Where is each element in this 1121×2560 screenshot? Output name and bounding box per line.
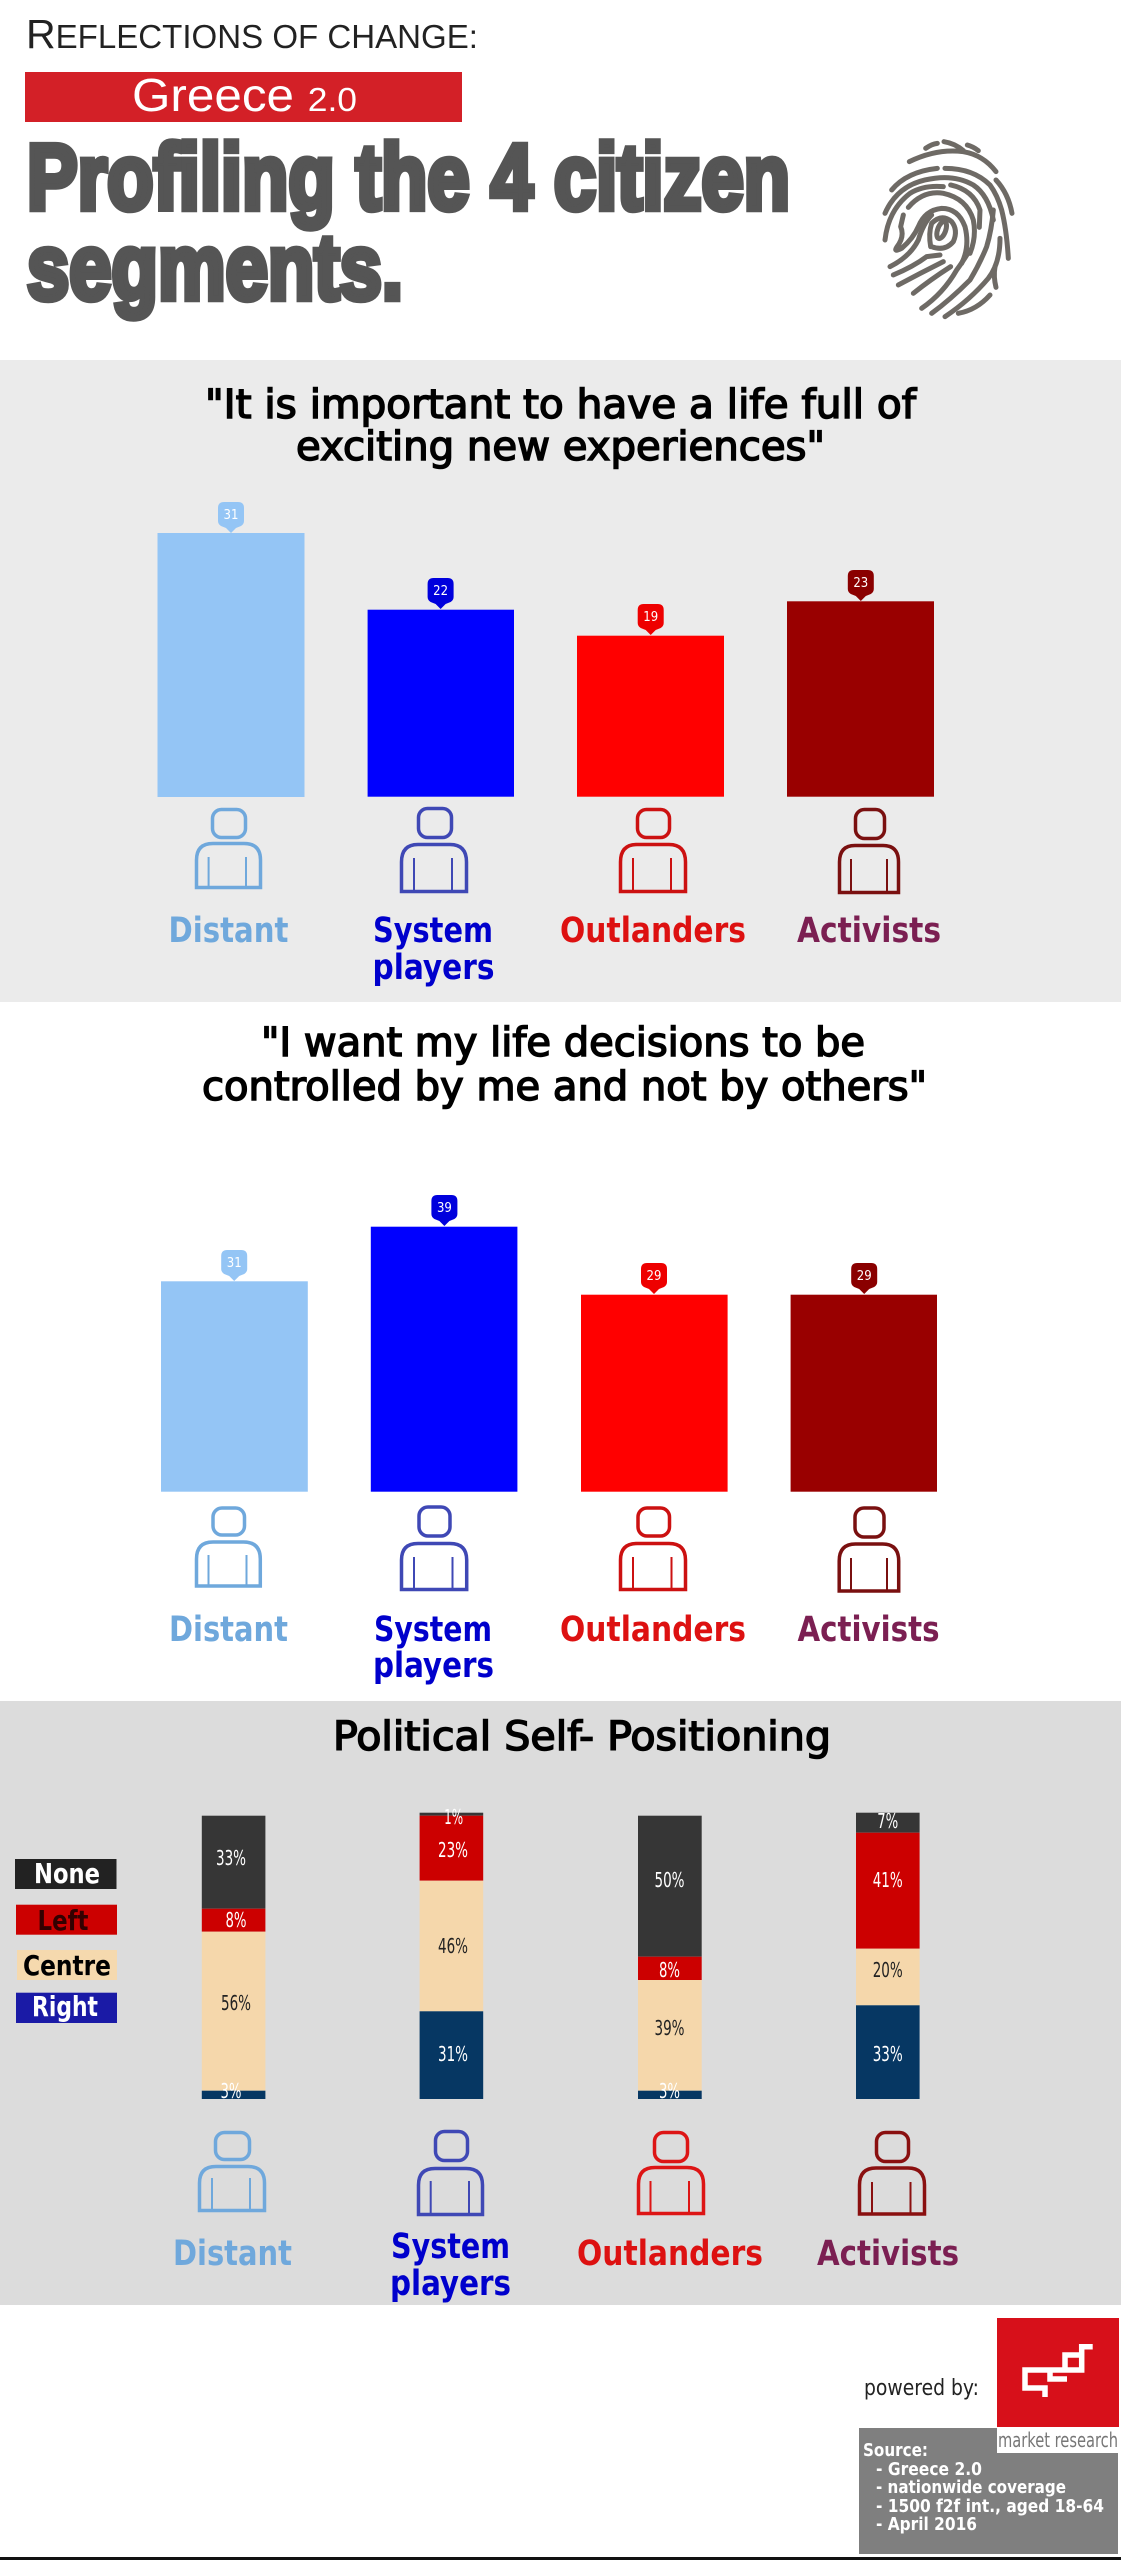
- stacked bar: Outlanders: [638, 1816, 702, 2103]
- icon: person System players: [402, 1507, 467, 1590]
- bar: Activists 29: [791, 1263, 937, 1492]
- heading: life decisions: [202, 1020, 927, 1110]
- bar: Distant 31: [161, 1250, 308, 1492]
- stacked bar: Activists: [856, 1809, 920, 2099]
- bar: Distant 31: 31: [224, 508, 238, 523]
- stacked bar: Outlanders: 8%: [659, 1958, 680, 1982]
- red banner: Greece 2.0: Greece 2.0: [132, 69, 357, 121]
- labels: segments: Activists: [817, 2234, 959, 2274]
- icon: person Outlanders: [638, 2132, 704, 2214]
- kicker: Reflections of change: REFLECTIONS OF CHANGE:: [26, 11, 478, 57]
- main title: [27, 125, 790, 319]
- legend: Centre: [23, 1949, 111, 1982]
- stacked bar: Distant: 33%: [216, 1846, 246, 1870]
- heading: exciting new experiences: exciting new experiences": [296, 424, 825, 470]
- labels: segments: System: [391, 2227, 510, 2267]
- source box: - nationwide coverage: [876, 2477, 1066, 2498]
- labels: segments: Outlanders: [577, 2234, 763, 2274]
- bar: System players 22: [368, 578, 514, 797]
- panel: political self-positioning: [0, 1701, 1121, 2305]
- bar: Outlanders 29: [581, 1263, 728, 1492]
- labels: segments: players: [373, 1646, 494, 1686]
- labels: segments: [173, 2227, 959, 2304]
- labels: segments: System: [373, 911, 493, 951]
- stacked bar: Activists: 41%: [873, 1868, 903, 1892]
- stacked bar: Outlanders: 3%: [659, 2079, 680, 2103]
- heading: life decisions: "I want my life decisions to be: [261, 1020, 865, 1066]
- stacked bar: System players: 46%: [438, 1934, 468, 1958]
- icon: person Distant: [200, 2132, 264, 2210]
- text: powered by: powered by:: [864, 2376, 979, 2401]
- stacked bar: System players: [420, 1805, 483, 2099]
- main title: Profiling the 4 citizen: [27, 125, 790, 229]
- stacked bar: Activists: 7%: [877, 1809, 898, 1833]
- icon: person System players: [402, 808, 466, 892]
- header: [25, 11, 1012, 319]
- legend: Left: [38, 1904, 88, 1937]
- stacked bar: Distant: 8%: [226, 1908, 246, 1932]
- stacked bar: Outlanders: 39%: [654, 2016, 684, 2040]
- icon: person Activists: [839, 1508, 899, 1591]
- legend: [15, 1857, 117, 2023]
- labels: segments: Distant: [169, 1610, 288, 1650]
- legend: None: [34, 1857, 100, 1890]
- stacked bar: System players: 1%: [444, 1805, 463, 1829]
- labels: segments: players: [372, 948, 494, 988]
- heading: exciting new experiences: "It is important to have a life full of: [205, 382, 918, 428]
- bar: Outlanders 29: 29: [647, 1269, 661, 1284]
- labels: segments: players: [390, 2264, 511, 2304]
- source box: - Greece 2.0: [876, 2459, 982, 2480]
- labels: segments: Outlanders: [560, 1610, 746, 1650]
- panel: life decisions: [161, 1020, 940, 1686]
- labels: segments: Activists: [798, 1610, 940, 1650]
- source box: - April 2016: [876, 2514, 977, 2535]
- labels: segments: [169, 1610, 940, 1686]
- main title: segments.: [27, 215, 403, 319]
- stacked bar: Activists: 33%: [873, 2042, 903, 2066]
- stacked bar: Outlanders: 50%: [654, 1868, 684, 1892]
- logo: market research: [997, 2318, 1119, 2453]
- icon: person Activists: [860, 2132, 924, 2214]
- icon: fingerprint: [885, 142, 1012, 317]
- source box: [859, 2428, 1118, 2554]
- labels: segments: Activists: [797, 911, 941, 951]
- bar: Activists 23: [787, 570, 934, 797]
- icon: person Outlanders: [620, 810, 686, 892]
- labels: segments: System: [374, 1610, 492, 1650]
- bar: Distant 31: [158, 502, 304, 797]
- bar: Activists 23: 23: [853, 576, 868, 591]
- heading: exciting new experiences: [205, 382, 918, 470]
- stacked bar: Distant: 3%: [220, 2079, 242, 2103]
- bar: Outlanders 19: 19: [643, 610, 658, 625]
- bar: Activists 29: 29: [857, 1269, 872, 1284]
- footer: [859, 2318, 1119, 2554]
- legend: Right: [32, 1990, 98, 2023]
- stacked bar: System players: 31%: [438, 2042, 468, 2066]
- labels: segments: Distant: [168, 911, 288, 951]
- red banner: Greece 2.0: [25, 69, 462, 122]
- heading: life decisions: controlled by me and not by others": [202, 1064, 927, 1110]
- icon: person Activists: [840, 810, 898, 892]
- stacked bar: System players: 23%: [438, 1838, 468, 1862]
- icon: person Distant: [196, 810, 260, 888]
- stacked bar: Distant: [202, 1816, 265, 2103]
- bar: System players 22: 22: [433, 584, 448, 599]
- bar: Distant 31: 31: [227, 1256, 242, 1271]
- stacked bar: Activists: 20%: [873, 1958, 903, 1982]
- labels: segments: Outlanders: [560, 911, 746, 951]
- heading: political self-positioning: Political Self- Positioning: [333, 1714, 831, 1760]
- panel: exciting new experiences: [0, 360, 1121, 1002]
- bar: System players 39: [371, 1195, 517, 1492]
- icon: person Outlanders: [620, 1508, 686, 1590]
- labels: segments: Distant: [173, 2234, 292, 2274]
- stacked bar: Distant: 56%: [221, 1991, 251, 2015]
- source box: Source:: [863, 2440, 928, 2461]
- labels: segments: [168, 911, 941, 988]
- icon: person Distant: [196, 1508, 260, 1586]
- icon: person System players: [418, 2132, 482, 2214]
- bar: System players 39: 39: [437, 1201, 452, 1216]
- bar: Outlanders 19: [577, 604, 724, 797]
